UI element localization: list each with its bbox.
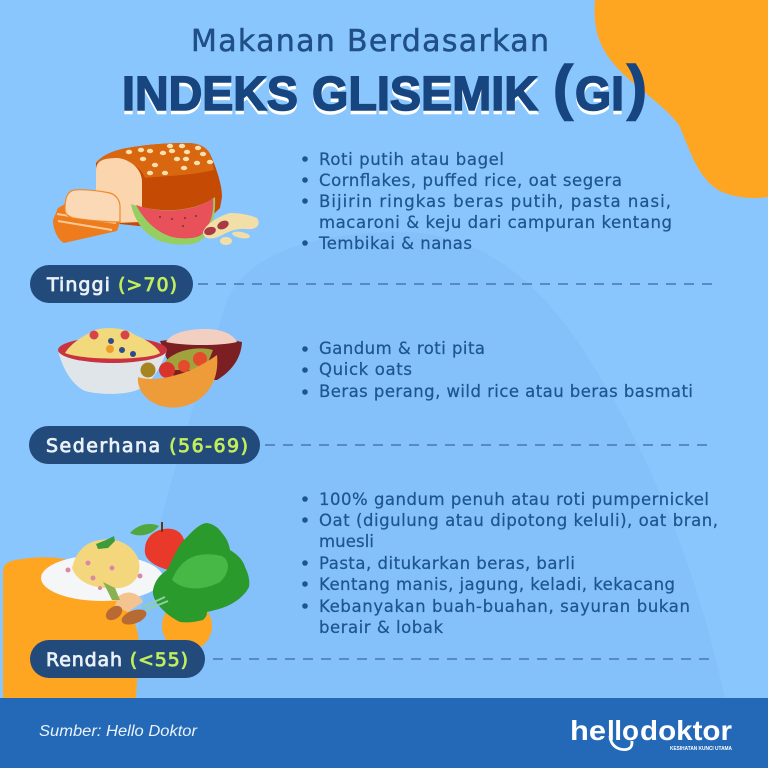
list: low GI foods: Oat (digulung atau dipotong keluli), oat bran, xyxy=(319,511,718,530)
list: high GI foods: macaroni & keju dari campuran kentang xyxy=(319,213,672,232)
pill: Tinggi: Tinggi (>70) xyxy=(46,274,177,296)
title line 2: INDEKS xyxy=(122,68,298,121)
background shape: orange small circle xyxy=(162,601,212,651)
logo: hellodoktor: KESIHATAN KUNCI UTAMA xyxy=(670,746,732,752)
title line 2: GLISEMIK xyxy=(312,72,538,124)
almonds and shell xyxy=(115,593,143,612)
list: medium GI foods: Quick oats xyxy=(319,360,412,379)
title line 1: Makanan Berdasarkan xyxy=(191,24,549,59)
title line 2: ( xyxy=(553,54,573,121)
logo: hellodoktor: doktor xyxy=(640,715,732,746)
icon: bread, watermelon and peanuts xyxy=(53,143,259,245)
list: low GI foods: Kentang manis, jagung, keladi, kekacang xyxy=(319,575,675,594)
list: medium GI foods xyxy=(302,339,693,401)
list: low GI foods xyxy=(302,490,718,637)
bread slices xyxy=(53,200,120,243)
greens xyxy=(153,523,249,622)
logo: hellodoktor: he xyxy=(570,715,606,746)
pill: Rendah: Rendah (<55) xyxy=(46,649,188,671)
list: high GI foods: Cornflakes, puffed rice, oat segera xyxy=(319,171,622,190)
pill: Rendah xyxy=(30,640,205,678)
list: low GI foods: Kebanyakan buah-buahan, sayuran bukan xyxy=(319,597,690,616)
logo: hellodoktor: o xyxy=(622,715,639,746)
list: high GI foods: Roti putih atau bagel xyxy=(319,150,504,169)
background shape: soft central blob xyxy=(130,232,725,698)
list: high GI foods xyxy=(302,150,672,253)
title line 2: GLISEMIK xyxy=(312,68,538,121)
peanuts xyxy=(203,213,259,239)
title line 2: ) xyxy=(627,54,647,121)
pill: Sederhana xyxy=(29,426,260,464)
title line 2 xyxy=(122,54,647,124)
title line 2: INDEKS xyxy=(122,72,298,124)
title line 2: GI xyxy=(575,68,624,121)
logo: hellodoktor xyxy=(570,715,732,752)
icon: pasta plate, apple and leafy greens xyxy=(41,522,249,628)
watermelon xyxy=(131,197,215,245)
list: low GI foods: Pasta, ditukarkan beras, barli xyxy=(319,554,575,573)
footer bar xyxy=(0,698,768,768)
background shape: orange bottom-left blob xyxy=(3,557,139,698)
source text: Sumber: Hello Doktor xyxy=(39,723,198,740)
title line 2: GI xyxy=(575,72,624,124)
apple xyxy=(145,529,184,570)
logo: hellodoktor: ll xyxy=(607,715,622,746)
list: medium GI foods: Gandum & roti pita xyxy=(319,339,485,358)
list: high GI foods: Bijirin ringkas beras putih, pasta nasi, xyxy=(319,192,671,211)
pill: Sederhana: Sederhana (56-69) xyxy=(46,435,248,457)
list: low GI foods: 100% gandum penuh atau roti pumpernickel xyxy=(319,490,709,509)
list: low GI foods: muesli xyxy=(319,532,374,551)
list: medium GI foods: Beras perang, wild rice atau beras basmati xyxy=(319,382,693,401)
list: high GI foods: Tembikai & nanas xyxy=(318,234,472,253)
icon: bowls of food xyxy=(58,328,242,408)
pill: Tinggi xyxy=(30,265,193,303)
list: low GI foods: berair & lobak xyxy=(319,618,443,637)
background shape: orange top-right blob xyxy=(594,0,768,198)
